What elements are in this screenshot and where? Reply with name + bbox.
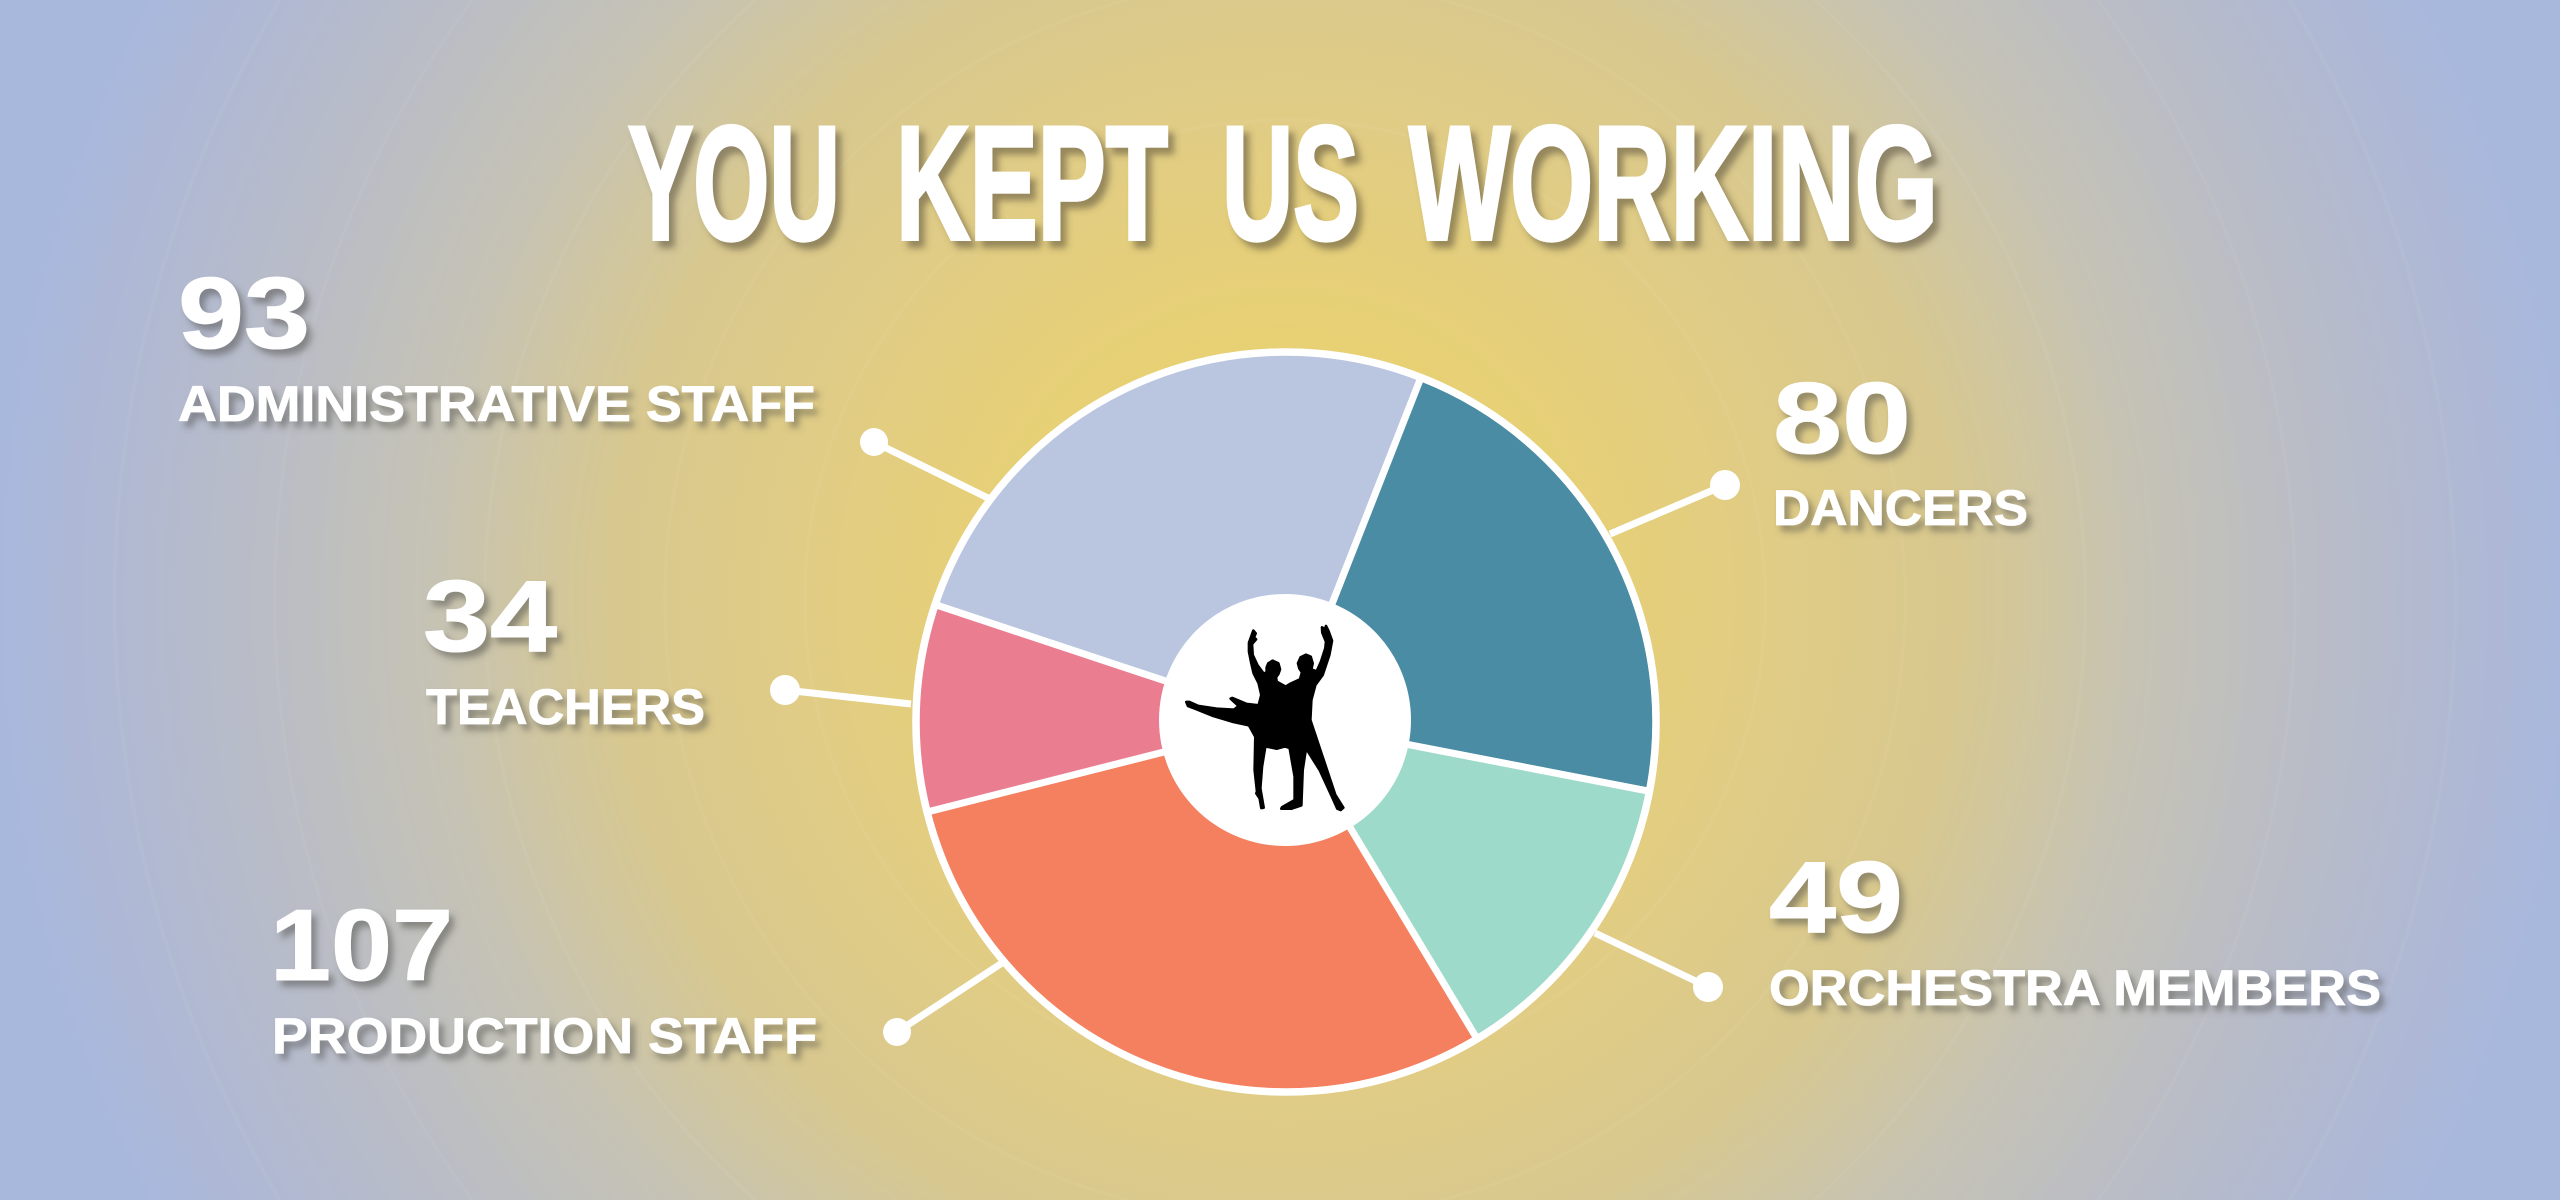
wedge: dancers 80	[1286, 378, 1656, 791]
number 49: 49	[1769, 842, 1903, 954]
wedge: administrative staff 93	[935, 352, 1421, 721]
pie chart	[916, 352, 1656, 1092]
title: WORKING	[1409, 93, 1938, 274]
icon: ballet dancers silhouette	[1186, 626, 1343, 810]
label administrative staff: ADMINISTRATIVE STAFF	[178, 376, 815, 432]
leader line: administrative staff	[860, 428, 988, 498]
callout: 49 orchestra members	[1769, 842, 2381, 1016]
title	[628, 93, 1938, 274]
label orchestra members: ORCHESTRA MEMBERS	[1769, 960, 2381, 1016]
leader line: teachers	[770, 675, 911, 705]
number 34: 34	[423, 561, 557, 673]
callout: 80 dancers	[1773, 363, 2028, 536]
label teachers: TEACHERS	[426, 679, 705, 735]
leader line: dancers	[1610, 470, 1740, 534]
number 93: 93	[178, 258, 310, 370]
callout: 107 production staff	[270, 890, 817, 1064]
label production staff: PRODUCTION STAFF	[272, 1008, 817, 1064]
callout: 93 administrative staff	[178, 258, 815, 432]
leader line: orchestra members	[1595, 933, 1723, 1002]
leader line: production staff	[883, 963, 1002, 1046]
callout: 34 teachers	[423, 561, 705, 735]
center white circle	[1159, 594, 1411, 846]
title: US	[1222, 93, 1359, 274]
title: KEPT	[896, 93, 1168, 274]
wedge: teachers 34	[916, 605, 1286, 812]
label dancers: DANCERS	[1773, 480, 2028, 536]
wedge: orchestra members 49	[1286, 721, 1650, 1039]
title: YOU	[628, 93, 840, 274]
wedge: production staff 107	[927, 721, 1477, 1092]
number 80: 80	[1773, 363, 1911, 475]
number 107: 107	[270, 890, 453, 1002]
